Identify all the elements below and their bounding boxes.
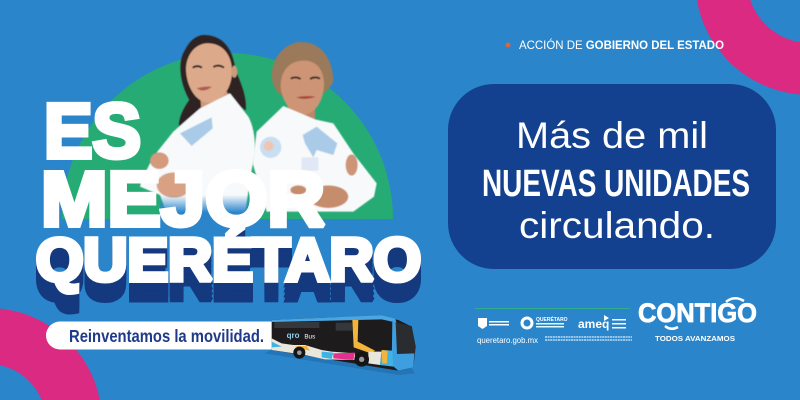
left woman photo fade xyxy=(160,195,251,220)
kicker text: ACCIÓN DE GOBIERNO DEL ESTADO xyxy=(519,39,724,52)
green semicircle xyxy=(62,53,393,219)
woman left xyxy=(140,35,255,213)
title words: QUERÉTARO xyxy=(36,226,421,294)
kicker label xyxy=(506,39,724,52)
photo: two women in white shirts xyxy=(140,35,377,220)
logo: Contigo xyxy=(638,298,757,343)
logo: ameq xyxy=(578,315,626,331)
slogan text: Reinventamos la movilidad. xyxy=(69,326,264,346)
title shadow: QUERÉTARO xyxy=(36,246,421,313)
logo: Querétaro: QUERÉTARO xyxy=(536,315,568,323)
headline line 1: Más de mil xyxy=(516,115,708,156)
logo: state government xyxy=(478,318,509,329)
title words: MEJOR xyxy=(41,156,325,242)
tagline: TODOS AVANZAMOS xyxy=(655,334,735,343)
decorative ring: top right xyxy=(697,0,800,95)
title words: ES xyxy=(44,88,141,174)
fine print xyxy=(545,337,632,340)
title shadow: QUERÉTARO xyxy=(36,231,421,298)
decorative ring: bottom left xyxy=(0,309,100,400)
bullet xyxy=(506,42,510,48)
title shadow: QUERÉTARO xyxy=(36,236,421,303)
bus lettering: qro xyxy=(287,331,300,340)
title shadow: QUERÉTARO xyxy=(36,241,421,308)
logo: Contigo: CONTIGO xyxy=(638,298,757,328)
title words xyxy=(36,88,421,294)
slogan pill xyxy=(46,322,285,350)
logo: Querétaro xyxy=(522,315,568,328)
website: queretaro.gob.mx xyxy=(477,335,539,345)
panel: headline box xyxy=(448,84,776,269)
title: Es mejor Querétaro xyxy=(36,88,421,313)
logo: ameq: ameq xyxy=(578,317,609,331)
icon: qroBus bus xyxy=(265,315,416,375)
headline line 3: circulando. xyxy=(519,205,715,246)
icon: qroBus bus: Bus xyxy=(304,334,315,341)
woman right xyxy=(253,42,377,212)
logo strip xyxy=(475,308,632,345)
